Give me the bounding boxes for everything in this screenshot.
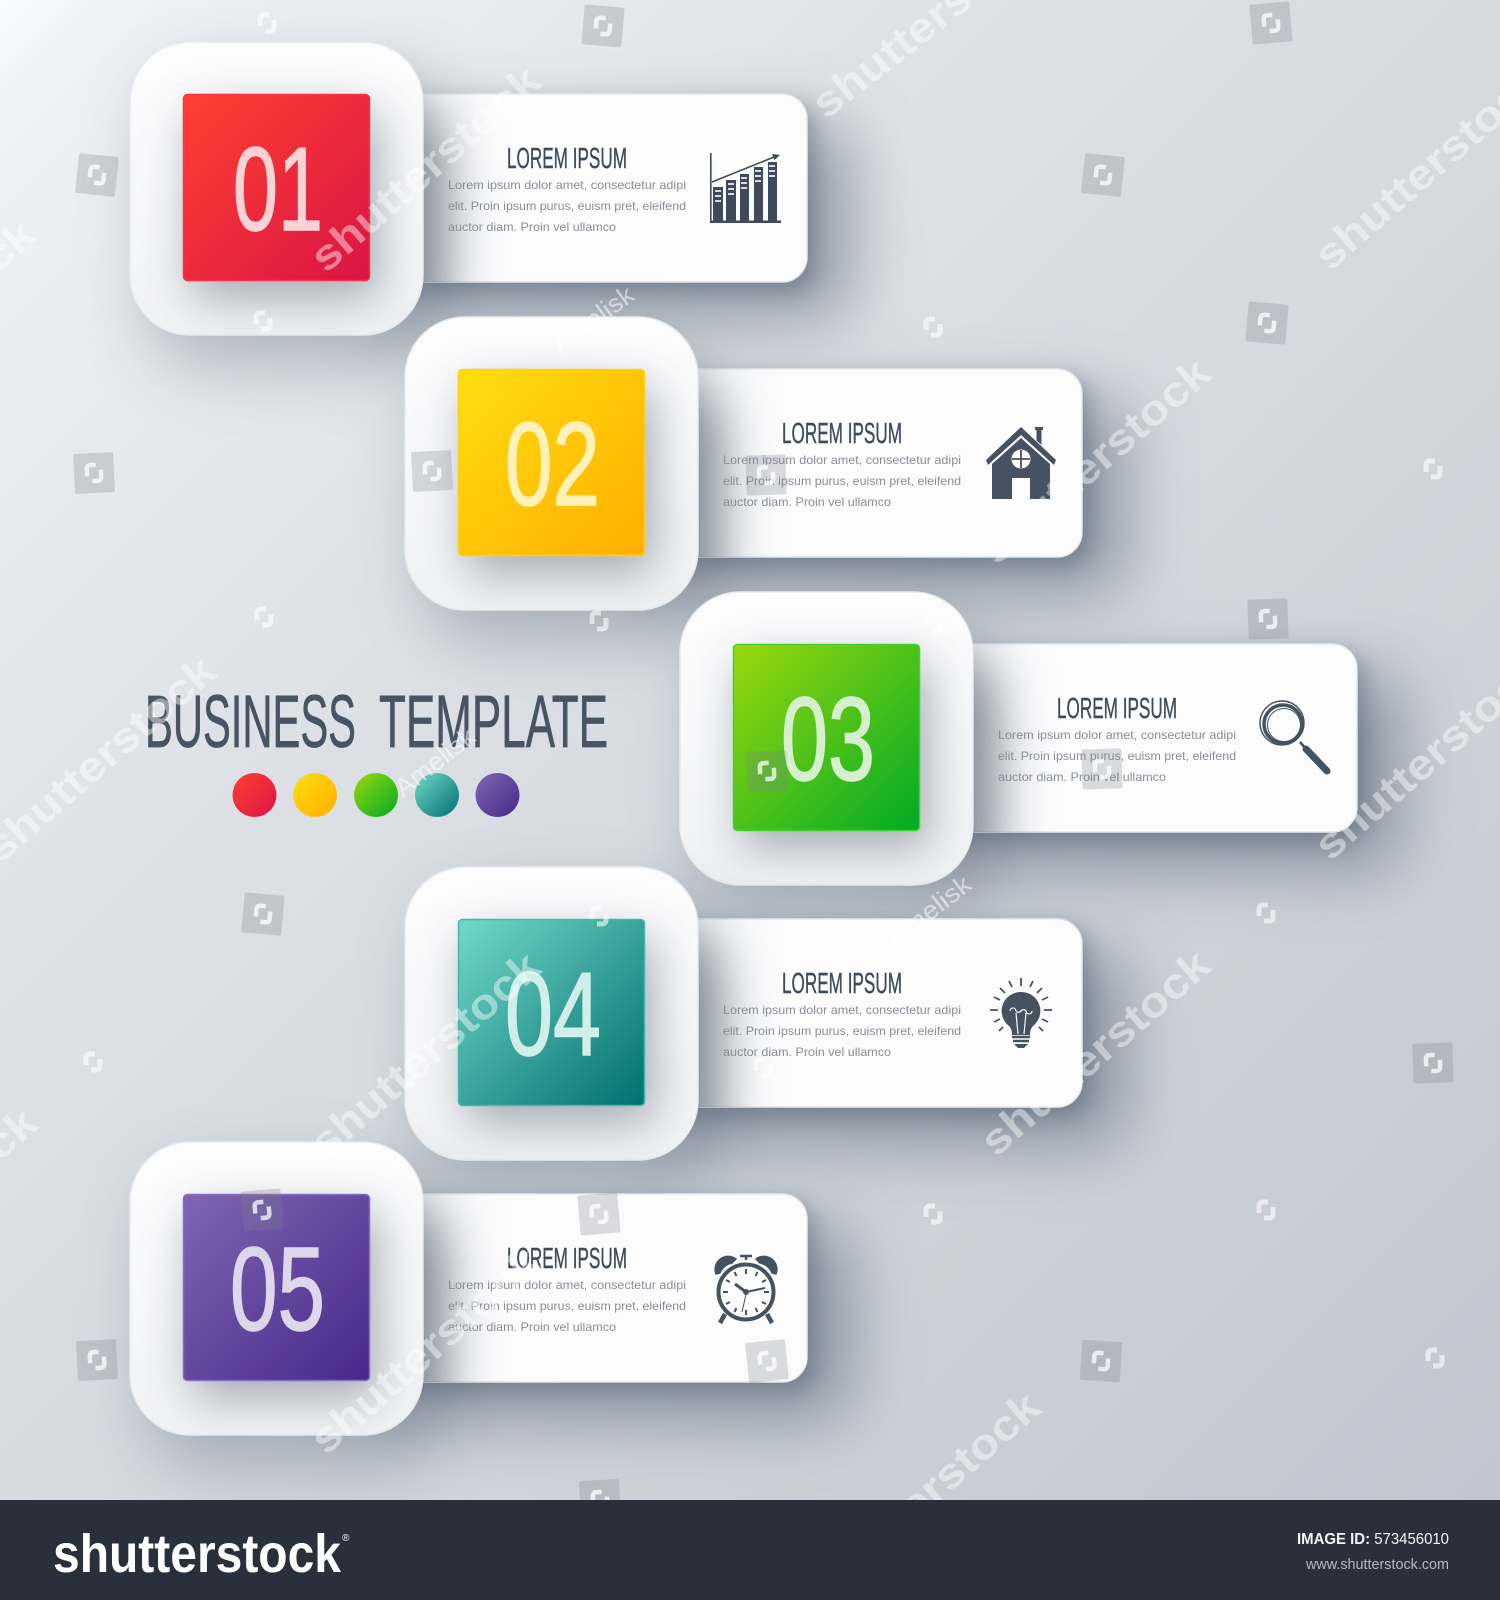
heading: step 02: LOREM IPSUM [782,418,902,450]
number: 02: 02 [505,398,600,531]
watermark overlay: shutterstock [301,1238,550,1464]
number: 04: 04 [505,948,601,1081]
card: step 02 [575,369,1082,557]
color dots [232,773,520,817]
body text: step 04: elit. Proin ipsum purus, euism pret, eleifend [723,1024,961,1038]
body text: step 03 [998,728,1236,784]
watermark overlay: shutterstock [971,940,1220,1166]
body text: step 03: elit. Proin ipsum purus, euism pret, eleifend [998,749,1236,763]
body text: step 03: Lorem ipsum dolor amet, consectetur adipi [998,728,1236,742]
number: 05: 05 [230,1223,325,1356]
color square: step 03 [734,644,920,830]
body text: step 05: elit. Proin ipsum purus, euism pret, eleifend [448,1299,686,1313]
image id: IMAGE ID: 573456010 [1297,1531,1449,1548]
body text: step 04: Lorem ipsum dolor amet, consectetur adipi [723,1003,961,1017]
tile: step 03 [680,592,973,885]
card: step 03 [850,644,1357,832]
icon: alarm clock [715,1256,777,1323]
color square: step 01 [184,94,370,280]
watermark overlay: shutterstock [301,56,550,282]
website: www.shutterstock.com [1305,1556,1449,1573]
body text: step 05: auctor diam. Proin vel ullamco [448,1320,616,1334]
watermark overlay: shutterstock [971,348,1220,574]
heading: step 05: LOREM IPSUM [507,1243,627,1275]
heading: step 01: LOREM IPSUM [507,143,627,175]
number: 03: 03 [781,673,875,806]
card: step 05 [300,1194,807,1382]
icon: house [986,427,1056,499]
title: TEMPLATE [379,680,608,763]
step 03 [680,592,1400,915]
footer logo: ® [342,1533,350,1544]
card: step 01 [300,94,807,282]
icon: light bulb [990,978,1052,1048]
step 02 [405,317,1125,640]
watermark overlay: Amelisk [388,721,482,803]
body text: step 04: auctor diam. Proin vel ullamco [723,1045,891,1059]
heading: step 04: LOREM IPSUM [782,968,902,1000]
body text: step 01: auctor diam. Proin vel ullamco [448,220,616,234]
body text: step 02: Lorem ipsum dolor amet, consectetur adipi [723,453,961,467]
tile: step 01 [130,42,423,335]
body text: step 01: elit. Proin ipsum purus, euism pret, eleifend [448,199,686,213]
body text: step 05: Lorem ipsum dolor amet, consectetur adipi [448,1278,686,1292]
color square: step 05 [184,1194,370,1380]
tile: step 04 [405,867,698,1160]
body text: step 02: elit. Proin ipsum purus, euism pret, eleifend [723,474,961,488]
watermark overlay: Amelisk [546,279,640,359]
heading: step 03: LOREM IPSUM [1057,693,1177,725]
body text: step 03: auctor diam. Proin vel ullamco [998,770,1166,784]
card: step 04 [575,919,1082,1107]
step 04 [405,867,1125,1190]
watermark overlay: shutterstock [301,942,550,1168]
body text: step 04 [723,1003,961,1059]
step 05 [130,1142,850,1465]
footer logo: shutterstock [53,1524,342,1584]
body text: step 02: auctor diam. Proin vel ullamco [723,495,891,509]
icon: magnifier [1260,701,1327,771]
body text: step 01: Lorem ipsum dolor amet, consectetur adipi [448,178,686,192]
tile: step 02 [405,317,698,610]
color square: step 04 [458,920,644,1106]
step 01 [130,42,850,365]
icon: bar chart [710,153,781,223]
body text: step 01 [448,178,686,234]
color square: step 02 [458,370,644,556]
title: BUSINESS [145,680,356,763]
body text: step 05 [448,1278,686,1334]
number: 01: 01 [233,123,323,256]
body text: step 02 [723,453,961,509]
tile: step 05 [130,1142,423,1435]
footer bar [0,1500,1500,1600]
watermark overlay: Amelisk [881,868,978,953]
